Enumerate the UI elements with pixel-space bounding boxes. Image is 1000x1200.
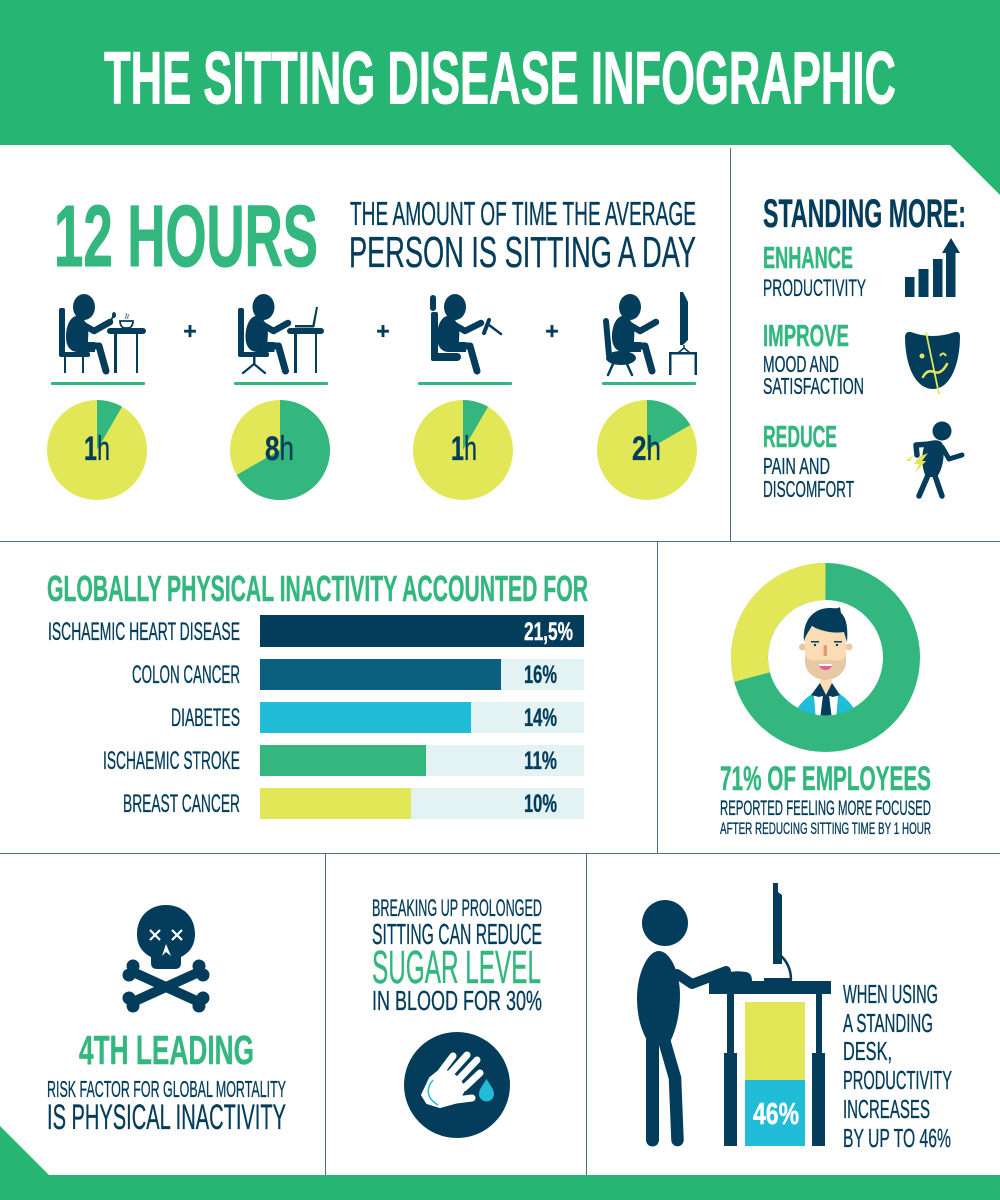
icon: person eating at table (59, 294, 146, 373)
text: breaking up prolonged sitting: IN BLOOD FOR 30% (372, 985, 542, 1016)
bar: ischaemic heart disease: 21,5% (524, 618, 573, 646)
icon: theatre mask (905, 332, 960, 394)
icon: person watching television (606, 292, 697, 375)
icon: person playing video game (430, 294, 501, 371)
icon: person with back pain (904, 422, 962, 496)
panel: standing desk (637, 883, 952, 1153)
bar: colon cancer (132, 659, 584, 690)
subheading: amount of time: PERSON IS SITTING A DAY (349, 228, 696, 277)
bar chart (48, 615, 584, 819)
text: reduce pain: PAIN AND (763, 453, 830, 479)
pie chart: 2h television: 2h (632, 430, 661, 468)
panel: global physical inactivity (47, 568, 588, 819)
text: enhance productivity: PRODUCTIVITY (763, 275, 866, 302)
text: risk factor for global mortality: IS PHYSICAL INACTIVITY (47, 1098, 286, 1137)
bar: ischaemic stroke: 11% (524, 747, 557, 775)
icon: hand and blood drop (404, 1032, 510, 1138)
bar: breast cancer (123, 788, 584, 819)
pie chart: 1h gaming: 1h (451, 430, 477, 468)
text: improve mood (763, 318, 864, 399)
text: standing desk productivity (843, 979, 952, 1153)
plus sign: + (183, 318, 197, 344)
stat: 4th leading: 4TH LEADING (79, 1027, 254, 1073)
pie chart: 8h work: 8h (265, 430, 294, 468)
text: reduce pain (763, 419, 854, 502)
bar: breast cancer: 10% (524, 790, 557, 818)
text: risk factor for global mortality (47, 1076, 286, 1137)
text: reduce pain: DISCOMFORT (763, 476, 854, 502)
text: breaking up prolonged sitting: SITTING CAN REDUCE (372, 919, 542, 951)
heading: globally physical inactivity: GLOBALLY PHYSICAL INACTIVITY ACCOUNTED FOR (47, 568, 588, 609)
footer band (0, 1175, 1000, 1200)
bar: 46 percent productivity (745, 1002, 805, 1146)
corner triangle (0, 1126, 49, 1175)
panel: standing more (763, 192, 966, 502)
bar: ischaemic heart disease: ISCHAEMIC HEART DISEASE (48, 618, 240, 646)
donut chart: 71 percent (749, 581, 902, 734)
bar: ischaemic stroke (103, 745, 584, 776)
subheading: amount of time (349, 195, 696, 277)
text: reduce pain: REDUCE (763, 419, 837, 454)
bar: diabetes: DIABETES (171, 704, 240, 732)
pie chart: 1h eating: 1h (84, 430, 110, 468)
pie chart: 1h gaming (413, 400, 513, 500)
text: breaking up prolonged sitting (372, 895, 542, 1016)
text: breaking up prolonged sitting: BREAKING UP PROLONGED (372, 895, 542, 922)
text: reported feeling more focused (720, 797, 931, 838)
bar: ischaemic heart disease (48, 615, 584, 647)
text: improve mood: MOOD AND (763, 351, 839, 377)
panel: employees focus (720, 581, 931, 838)
text: improve mood: SATISFACTION (763, 373, 864, 399)
bar: colon cancer: COLON CANCER (132, 661, 240, 689)
icon: rising bar chart (905, 238, 960, 297)
text: improve mood: IMPROVE (763, 318, 849, 353)
activity underlines (51, 382, 696, 385)
pie chart: 2h television (597, 400, 697, 500)
bar: diabetes: 14% (524, 704, 557, 732)
text: enhance productivity (763, 240, 866, 302)
text: breaking up prolonged sitting: SUGAR LEVEL (372, 941, 541, 993)
plus sign: + (376, 318, 390, 344)
icon: person working at laptop (238, 294, 324, 373)
icon: skull and crossbones (122, 905, 210, 1012)
bar: breast cancer: BREAST CANCER (123, 790, 240, 818)
header banner (0, 0, 1000, 195)
pie chart: 8h work (230, 400, 330, 500)
text: standing desk productivity: A STANDING (843, 1008, 933, 1038)
bar: diabetes (171, 702, 584, 733)
panel: blood sugar (372, 895, 542, 1138)
text: enhance productivity: ENHANCE (763, 240, 853, 275)
headline: 12 hours: 12 HOURS (54, 188, 318, 285)
subheading: amount of time: THE AMOUNT OF TIME THE AVERAGE (350, 195, 696, 232)
plus sign: + (545, 318, 559, 344)
panel: leading risk factor (0, 905, 286, 1175)
pie chart: 1h eating (47, 400, 147, 500)
text: standing desk productivity: DESK, (843, 1036, 892, 1066)
text: risk factor for global mortality: RISK FACTOR FOR GLOBAL MORTALITY (47, 1076, 286, 1102)
icon: person at standing desk (637, 883, 831, 1146)
panel: twelve hours sitting (47, 188, 697, 500)
bar: 46 percent productivity: 46% (753, 1096, 799, 1131)
bar: ischaemic stroke: ISCHAEMIC STROKE (103, 747, 240, 775)
icon: smiling office worker (798, 607, 854, 716)
text: standing desk productivity: INCREASES (843, 1094, 930, 1124)
bar: colon cancer: 16% (524, 661, 557, 689)
